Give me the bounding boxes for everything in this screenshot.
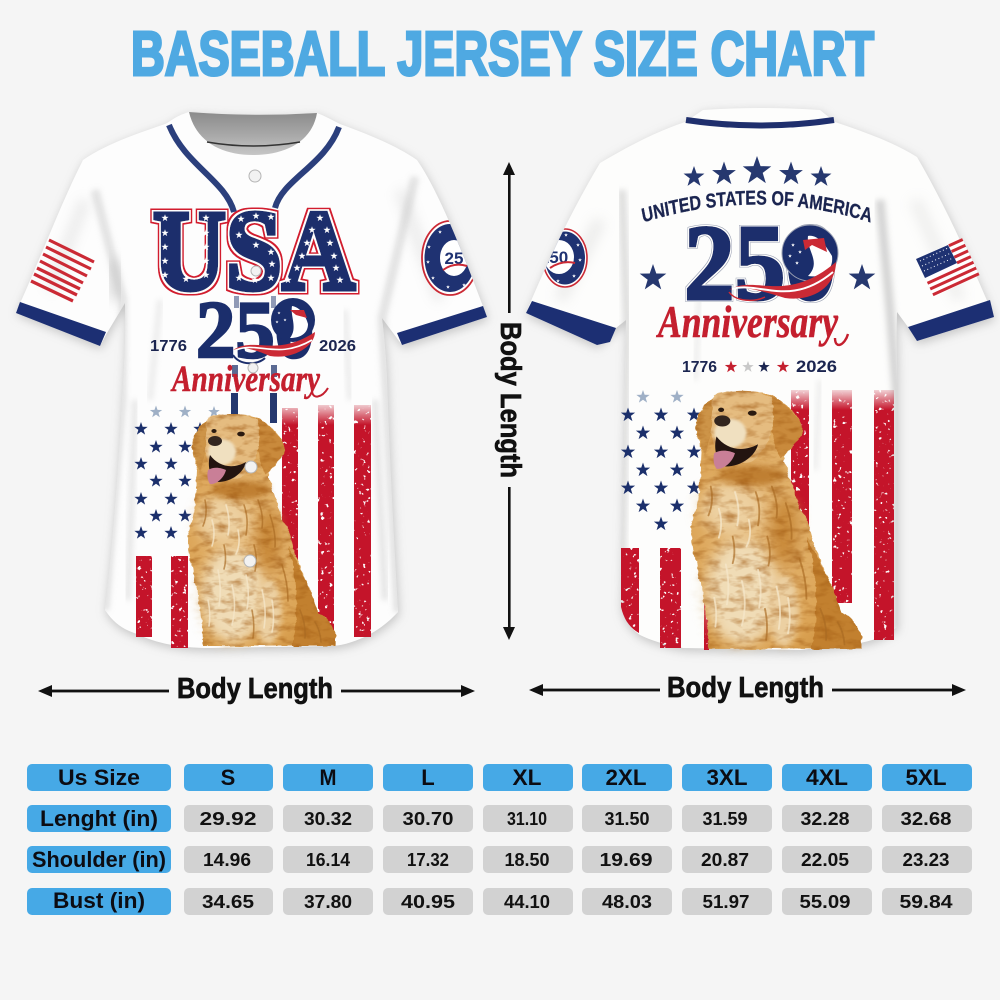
header row: L [421, 765, 435, 790]
placket piping [231, 296, 277, 423]
size table [27, 764, 972, 915]
header row: S [221, 765, 235, 790]
shoulder row: 23.23 [902, 849, 950, 870]
collar band [686, 120, 834, 126]
letter stars [161, 212, 344, 283]
length row: 31.10 [507, 808, 547, 829]
length row: 32.28 [800, 808, 850, 829]
right horizontal dimension arrow: Body Length [667, 672, 824, 704]
shoulder row: 16.14 [306, 849, 351, 870]
sleeve badge: 25 [445, 249, 463, 268]
length row: 31.59 [702, 808, 748, 829]
length row: 32.68 [900, 808, 952, 829]
shoulder row [27, 846, 972, 873]
neck tape [207, 142, 300, 146]
United States of America arc: UNITED STATES OF AMERICA [641, 190, 871, 223]
front jersey [16, 112, 488, 651]
jersey drop shadow [17, 115, 488, 651]
star row [725, 360, 789, 372]
bust row: 37.80 [304, 891, 352, 912]
bust row: 48.03 [602, 891, 652, 912]
shoulder row: Shoulder (in) [32, 847, 166, 872]
sleeve badge [540, 229, 587, 287]
length row [27, 805, 972, 832]
bust row: 44.10 [504, 891, 550, 912]
shoulder row: 14.96 [203, 849, 251, 870]
back jersey [525, 106, 997, 658]
2026: 2026 [319, 338, 356, 355]
left cuff [526, 301, 616, 345]
flag stripes, distressed [621, 390, 894, 650]
shoulder row: 22.05 [801, 849, 849, 870]
bust row: 59.84 [900, 891, 953, 912]
header row: 5XL [906, 765, 946, 790]
shoulder row: 18.50 [504, 849, 550, 870]
sleeve flag stripes [31, 240, 94, 301]
length row: 29.92 [200, 808, 256, 829]
250 logo, front: 250 [196, 284, 314, 375]
flag stars [134, 406, 220, 539]
2026: 2026 [796, 358, 837, 376]
flag stars [621, 390, 701, 530]
vertical dimension arrow [494, 162, 526, 640]
left horizontal dimension arrow [38, 673, 475, 705]
250 logo, back: 250 [684, 204, 836, 323]
shoulder row: 17.32 [407, 849, 449, 870]
jersey drop shadow [527, 111, 995, 653]
header row: Us Size [58, 765, 140, 790]
bust row [27, 888, 972, 915]
header row: 4XL [806, 765, 848, 790]
jersey body [16, 112, 487, 648]
vertical dimension arrow: Body Length [494, 322, 526, 478]
right horizontal dimension arrow [529, 672, 966, 704]
side stars [640, 264, 875, 289]
bust row: Bust (in) [53, 888, 145, 913]
dog photo, front [188, 414, 336, 646]
left horizontal dimension arrow: Body Length [177, 673, 333, 705]
sleeve badge [422, 221, 478, 295]
right cuff [908, 300, 994, 341]
dog photo, back [691, 391, 862, 649]
fold shading [560, 190, 960, 630]
length row: 30.70 [402, 808, 454, 829]
1776: 1776 [150, 338, 187, 355]
Anniversary script: Anniversary [656, 297, 839, 347]
length row: 31.50 [604, 808, 650, 829]
header row: 3XL [706, 765, 748, 790]
collar piping [169, 125, 339, 212]
bust row: 34.65 [202, 891, 254, 912]
header row: 2XL [606, 765, 646, 790]
header row: XL [512, 765, 542, 790]
Anniversary script: Anniversary [170, 359, 320, 400]
flag stripes, distressed [136, 405, 371, 648]
shoulder row: 19.69 [600, 849, 652, 870]
fold shading [50, 177, 440, 612]
left cuff [16, 302, 106, 346]
USA lettering: USA [153, 187, 355, 314]
jersey body [526, 108, 994, 650]
bust row: 51.97 [702, 891, 750, 912]
1776: 1776 [682, 359, 717, 376]
header row: M [320, 765, 336, 790]
length row: 30.32 [304, 808, 352, 829]
right cuff [397, 306, 487, 345]
shoulder row: 20.87 [701, 849, 749, 870]
sleeve flag [916, 238, 979, 297]
header row [27, 764, 972, 791]
buttons [244, 170, 261, 567]
neck opening [189, 112, 317, 155]
length row: Lenght (in) [40, 806, 158, 831]
bust row: 55.09 [800, 891, 850, 912]
sleeve badge: 250 [540, 248, 568, 267]
bust row: 40.95 [401, 891, 455, 912]
five stars [684, 156, 831, 186]
